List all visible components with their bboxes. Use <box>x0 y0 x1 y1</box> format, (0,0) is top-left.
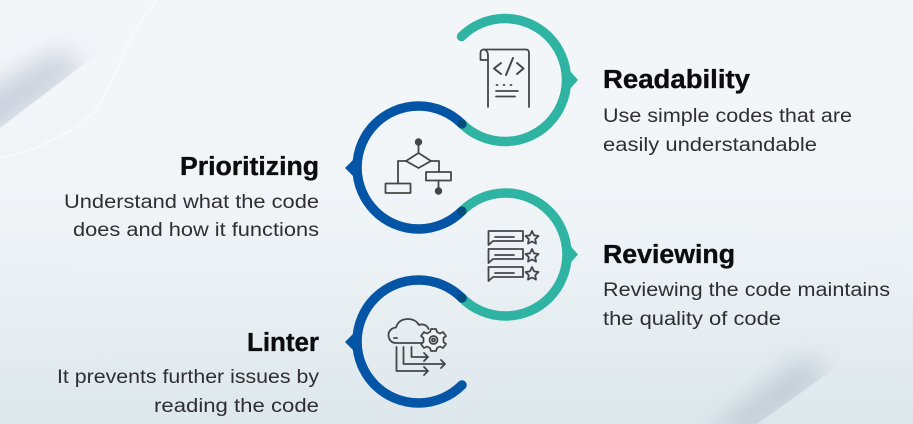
ring: reviewing teal <box>457 193 578 316</box>
ring: linter blue <box>345 280 467 403</box>
text: readability: Use simple codes that are <box>603 106 852 127</box>
icon: flowchart <box>386 139 451 194</box>
ring: prioritizing blue <box>345 106 467 229</box>
text: readability: Readability <box>603 66 751 94</box>
text: prioritizing: Prioritizing <box>180 153 319 181</box>
text: prioritizing: Understand what the code <box>64 192 319 213</box>
text: linter: It prevents further issues by <box>57 367 320 388</box>
text: reviewing <box>603 241 890 330</box>
text: prioritizing: does and how it functions <box>73 220 319 241</box>
text: linter: Linter <box>247 329 319 357</box>
icon: rated comments <box>488 231 538 281</box>
icon: code document <box>480 50 529 107</box>
icon: cloud with gear and arrows <box>388 319 446 375</box>
text: readability <box>603 66 852 156</box>
text: prioritizing <box>64 153 319 241</box>
text: reviewing: Reviewing the code maintains <box>603 280 890 301</box>
ring: readability teal <box>462 18 578 142</box>
text: readability: easily understandable <box>603 135 817 156</box>
text: reviewing: the quality of code <box>603 309 781 330</box>
text: linter <box>57 329 320 417</box>
text: reviewing: Reviewing <box>603 241 735 269</box>
text: linter: reading the code <box>154 396 319 417</box>
